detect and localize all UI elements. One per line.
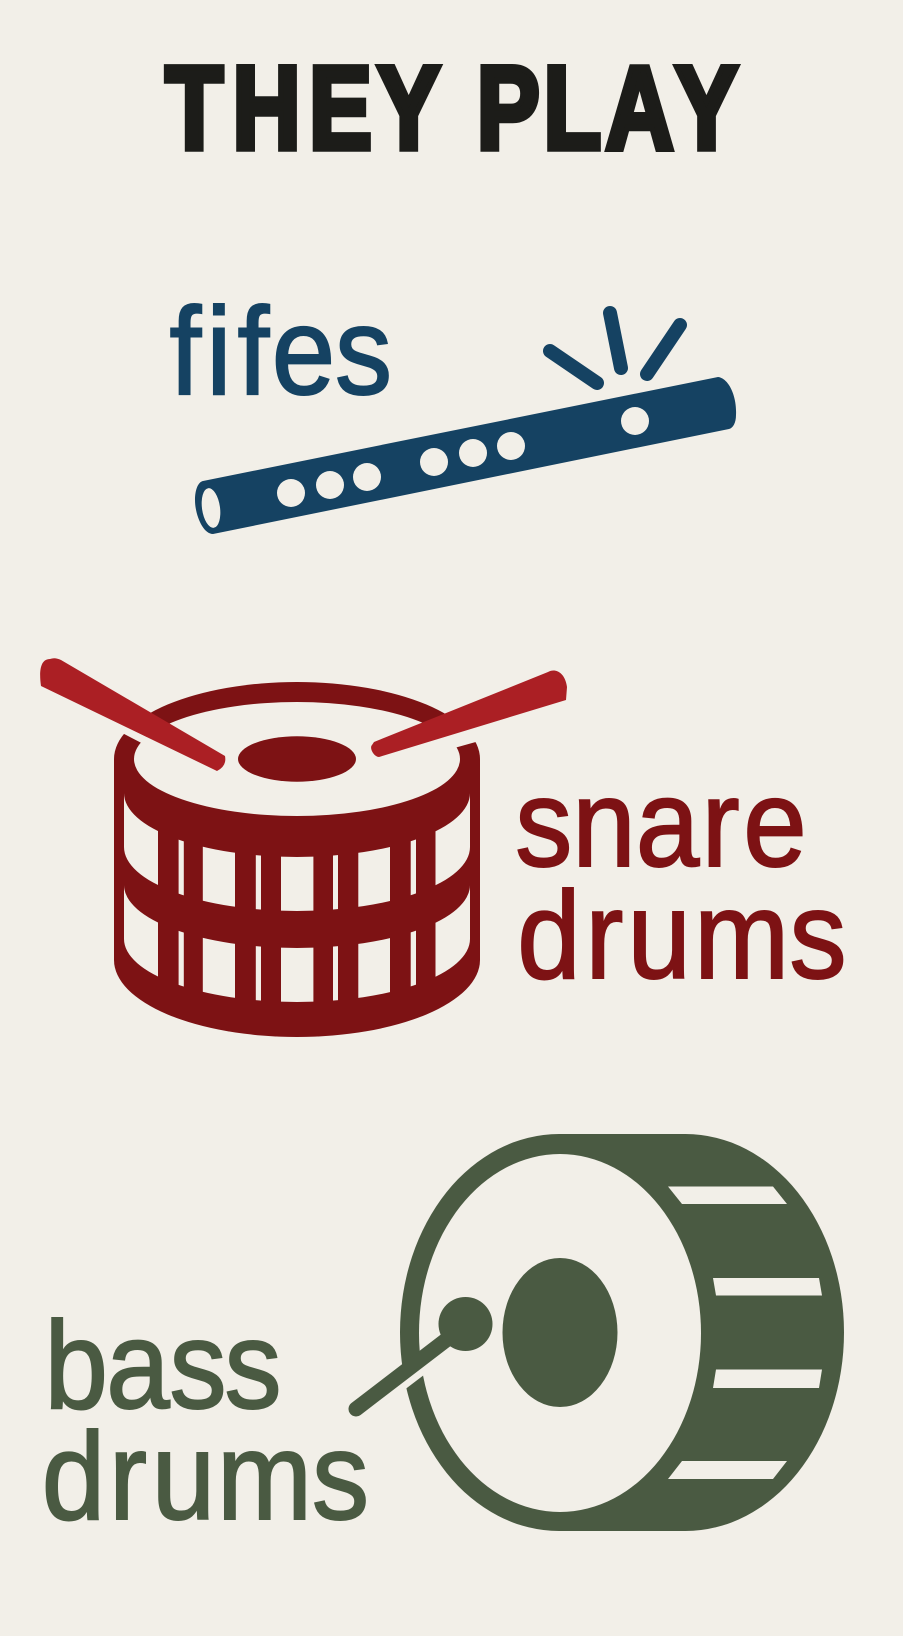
drum shell (114, 682, 480, 1037)
icon: fife (195, 313, 736, 534)
stick gaps (105, 716, 490, 752)
label: snare drums (515, 755, 846, 1005)
fife open end (199, 487, 223, 529)
right drumstick (371, 671, 567, 757)
icon: bass drum (356, 1134, 844, 1531)
word: bass: bass (45, 1297, 282, 1435)
shell windows (124, 780, 470, 1010)
mallet gap (395, 1353, 437, 1397)
head centre (502, 1258, 618, 1407)
shell slots (668, 1186, 822, 1479)
label: bass drums (42, 1297, 369, 1546)
label: fifes: fifes (170, 283, 392, 421)
fife finger holes (277, 407, 649, 507)
drum shell (400, 1134, 844, 1531)
head centre (238, 736, 356, 782)
drum head (419, 1154, 701, 1512)
word: drums: drums (42, 1408, 369, 1546)
left drumstick (40, 658, 225, 771)
sound lines (550, 313, 680, 383)
drum head (134, 702, 460, 816)
mallet (356, 1297, 492, 1409)
word: drums: drums (517, 867, 846, 1005)
word: snare: snare (515, 755, 807, 893)
icon: snare drum (40, 658, 567, 1037)
title: THEY PLAY (165, 42, 738, 174)
fife body (195, 377, 736, 534)
